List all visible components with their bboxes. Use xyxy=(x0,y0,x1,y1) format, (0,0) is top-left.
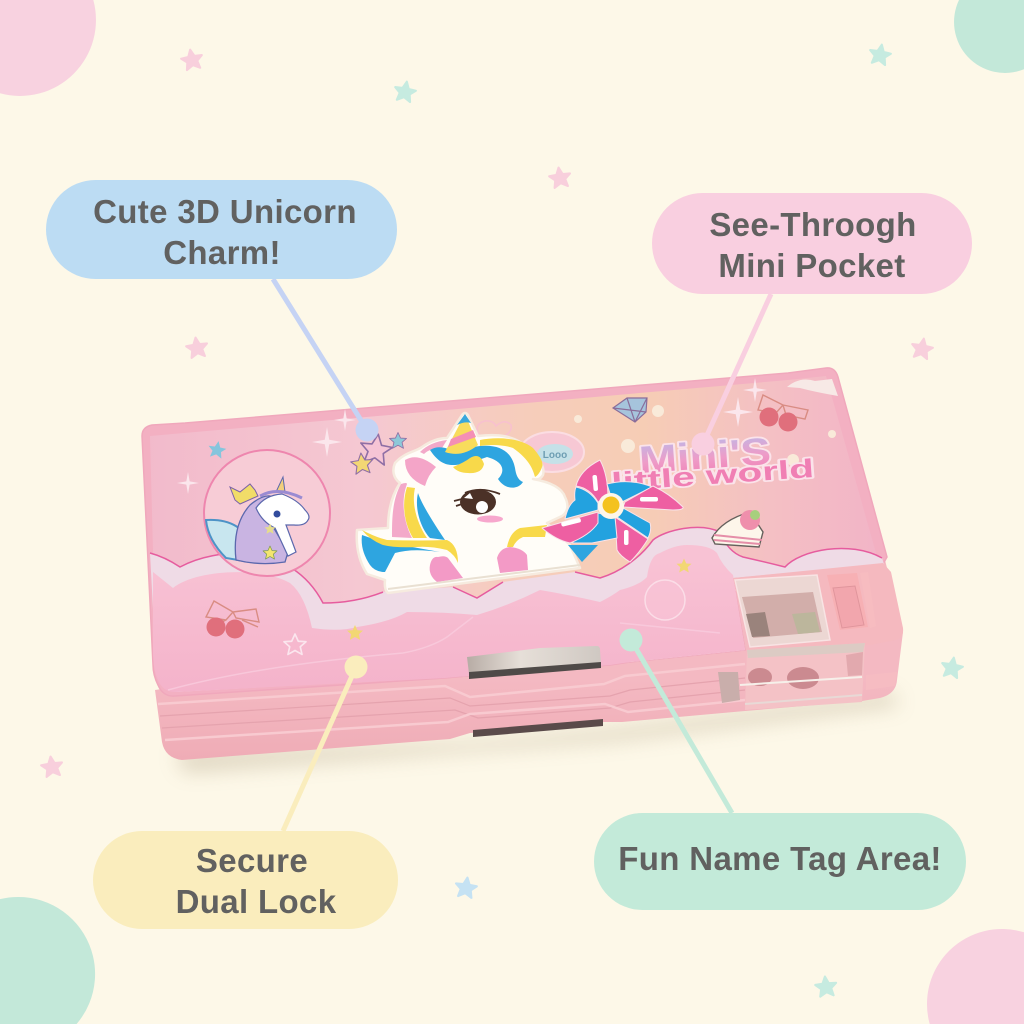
lid embossed ledge xyxy=(168,617,720,690)
lid white sparkles xyxy=(177,378,767,494)
case base and side xyxy=(155,560,903,760)
callout: dual lock: Secure xyxy=(196,842,308,879)
lid white cloud top right xyxy=(787,379,838,396)
lock housing xyxy=(733,563,903,650)
pinwheel charm xyxy=(542,460,683,562)
lid brand text xyxy=(610,431,815,497)
blush xyxy=(477,516,503,522)
sticker: pink badge top centre: Looo xyxy=(543,450,567,461)
lid scalloped outline xyxy=(150,527,882,603)
cake sticker xyxy=(712,510,763,547)
callout: dual lock: Dual Lock xyxy=(176,883,337,920)
eye xyxy=(454,490,500,514)
mane xyxy=(392,483,412,538)
callout: mini pocket: Mini Pocket xyxy=(718,247,906,284)
product: unicorn pencil case xyxy=(142,368,903,772)
hooves xyxy=(430,556,463,582)
yellow curl xyxy=(453,456,484,473)
pink crest xyxy=(420,440,447,454)
blue forelock xyxy=(430,446,523,488)
lid pale scalloped band xyxy=(150,527,884,692)
3D unicorn charm xyxy=(357,413,598,593)
bow and cherries right xyxy=(758,395,808,432)
diamond sticker xyxy=(613,398,647,422)
corner circle: bottom left xyxy=(0,897,95,1024)
callout: dual lock xyxy=(93,656,398,929)
corner circle: top right xyxy=(954,0,1024,73)
wing xyxy=(362,535,440,572)
corner circle: bottom right xyxy=(927,929,1024,1024)
metal latch xyxy=(467,646,601,679)
corner circle: top left xyxy=(0,0,96,96)
base edge xyxy=(388,565,580,589)
lid printed artwork xyxy=(150,376,880,690)
yellow right mane xyxy=(480,438,543,477)
bubble on lid lower xyxy=(645,580,685,620)
lid lower pink area xyxy=(153,545,745,692)
sticker: pink badge top centre xyxy=(477,421,584,472)
horn xyxy=(445,414,478,454)
blue tail under pinwheel xyxy=(568,545,598,562)
bow and cherries left xyxy=(206,601,259,638)
case shadow xyxy=(175,692,900,772)
callout: unicorn charm xyxy=(46,180,397,442)
callout: unicorn charm: Charm! xyxy=(163,234,281,271)
callout: name tag: Fun Name Tag Area! xyxy=(618,840,942,877)
bubbles on lid xyxy=(574,405,836,466)
slider button xyxy=(827,573,868,630)
see-through window xyxy=(735,575,830,647)
dark bottom latch xyxy=(473,719,603,737)
right end ridges xyxy=(866,672,897,690)
case lid xyxy=(142,368,887,696)
callout: mini pocket xyxy=(652,193,972,456)
callout: unicorn charm: Cute 3D Unicorn xyxy=(93,193,357,230)
callout: mini pocket: See-Throogh xyxy=(709,206,917,243)
lid brand text: little world xyxy=(610,453,815,497)
small sticker stars xyxy=(207,432,692,654)
callout: name tag xyxy=(594,628,966,910)
ear xyxy=(405,457,436,486)
chest yellow xyxy=(507,525,547,547)
clear side compartment xyxy=(718,643,865,710)
lid brand text: Mini'S xyxy=(638,431,772,482)
circular badge: fairy unicorn xyxy=(204,450,330,576)
